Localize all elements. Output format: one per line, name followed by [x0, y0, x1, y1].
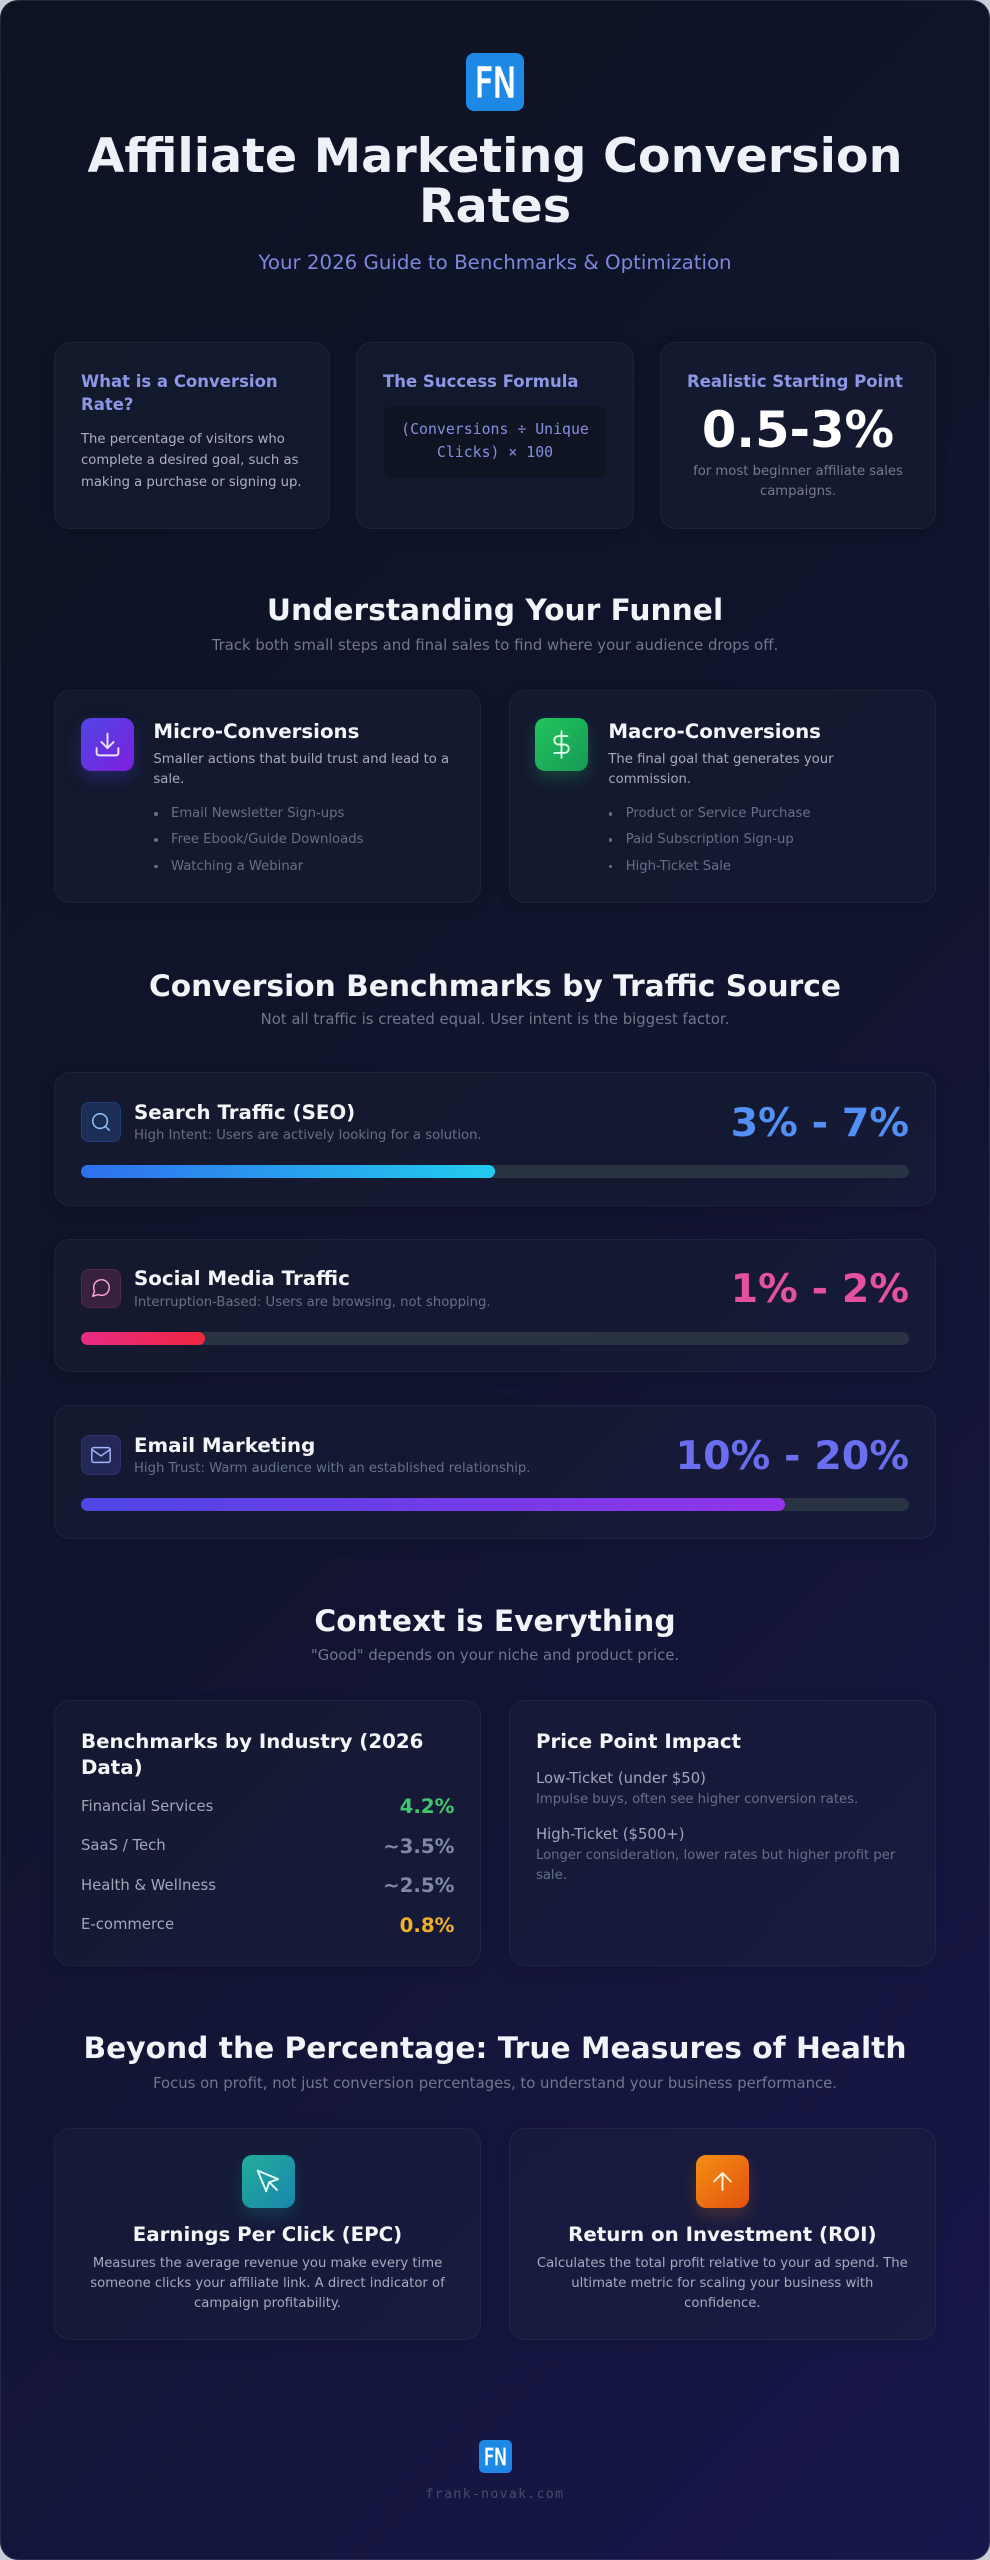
list of macro-conversions: Product or Service Purchase [626, 806, 810, 821]
card heading: Rate? [81, 395, 134, 414]
panel: benchmarks by industry [54, 1700, 481, 1966]
description [90, 2256, 445, 2311]
stat caption: campaigns. [760, 484, 836, 499]
description: campaign profitability. [194, 2296, 341, 2311]
card heading [81, 372, 278, 414]
heading [81, 1730, 423, 1779]
row: financial services: 4.2% [400, 1795, 454, 1818]
high-ticket description: Longer consideration, lower rates but higher profit per [536, 1848, 895, 1863]
formula box: Clicks) × 100 [437, 442, 553, 460]
description: Interruption-Based: Users are browsing, not shopping. [134, 1294, 491, 1310]
panel: what is a conversion rate [54, 342, 330, 529]
heading: Email Marketing [134, 1434, 315, 1457]
card body text: making a purchase or signing up. [81, 475, 302, 490]
icon: dollar [535, 718, 588, 771]
card body text: complete a desired goal, such as [81, 453, 298, 468]
description: sale. [153, 772, 184, 787]
panel: search traffic [54, 1072, 936, 1206]
high-ticket description: sale. [536, 1868, 567, 1883]
formula box: (Conversions ÷ Unique [401, 420, 589, 438]
subtitle: Your 2026 Guide to Benchmarks & Optimization [258, 251, 732, 274]
list of micro-conversions: Watching a Webinar [171, 859, 303, 874]
logo: FN [466, 53, 524, 111]
panel: micro-conversions [54, 690, 481, 903]
icon: arrow up [696, 2155, 749, 2208]
list of macro-conversions [609, 806, 810, 874]
row: health [81, 1874, 454, 1897]
formula box [384, 406, 606, 478]
progress bar [81, 1165, 909, 1178]
description: High Intent: Users are actively looking for a solution. [134, 1128, 482, 1143]
icon: download [81, 718, 134, 771]
description [537, 2256, 908, 2311]
heading: Earnings Per Click (EPC) [133, 2223, 402, 2246]
section heading: beyond: Beyond the Percentage: True Measures of Health [84, 2031, 906, 2066]
description: confidence. [684, 2296, 761, 2311]
section subheading: context: "Good" depends on your niche and product price. [311, 1646, 679, 1664]
stat caption: for most beginner affiliate sales [693, 464, 903, 479]
icon: cursor [242, 2155, 295, 2208]
list of macro-conversions: Paid Subscription Sign-up [626, 832, 794, 847]
icon: chat bubble [81, 1268, 121, 1308]
panel: email marketing [54, 1405, 936, 1538]
row: e-commerce: E-commerce [81, 1915, 174, 1933]
icon: envelope [81, 1435, 121, 1475]
panel: social media traffic [54, 1238, 936, 1372]
row: saas: SaaS / Tech [81, 1836, 166, 1854]
high-ticket description [536, 1848, 896, 1883]
value: 10% - 20% [676, 1432, 909, 1478]
row: financial services [81, 1795, 454, 1818]
section heading: benchmarks: Conversion Benchmarks by Traffic Source [149, 968, 841, 1004]
footer url: frank-novak.com [426, 2487, 564, 2502]
panel: earnings per click [54, 2128, 481, 2340]
card heading: Realistic Starting Point [687, 372, 903, 391]
description: Smaller actions that build trust and lead to a [153, 752, 449, 767]
card body text: The percentage of visitors who [81, 432, 285, 447]
list of macro-conversions: High-Ticket Sale [626, 859, 731, 874]
list of micro-conversions [154, 806, 363, 874]
row: saas: ~3.5% [383, 1834, 454, 1858]
description [153, 752, 449, 787]
low-ticket description: Impulse buys, often see higher conversion rates. [536, 1792, 858, 1807]
big stat: 0.5-3% [702, 401, 894, 459]
description: High Trust: Warm audience with an established relationship. [134, 1461, 530, 1476]
value: 3% - 7% [731, 1100, 909, 1146]
list of micro-conversions: Free Ebook/Guide Downloads [171, 832, 363, 847]
card heading: What is a Conversion [81, 372, 278, 391]
description: Measures the average revenue you make every time [93, 2256, 442, 2271]
description: The final goal that generates your [608, 752, 834, 767]
heading: Search Traffic (SEO) [134, 1101, 355, 1124]
icon: search [81, 1102, 121, 1142]
title [88, 129, 902, 234]
title: Affiliate Marketing Conversion [88, 129, 902, 184]
value: 1% - 2% [731, 1266, 909, 1312]
heading: Macro-Conversions [608, 720, 821, 743]
panel: price point impact [509, 1700, 936, 1966]
list of micro-conversions: Email Newsletter Sign-ups [171, 806, 344, 821]
section heading: funnel: Understanding Your Funnel [267, 593, 723, 628]
section subheading: beyond: Focus on profit, not just conversion percentages, to understand your business performance. [153, 2074, 837, 2092]
heading: Social Media Traffic [134, 1267, 350, 1290]
description: someone clicks your affiliate link. A direct indicator of [90, 2276, 445, 2291]
heading: Data) [81, 1756, 143, 1779]
row: health: ~2.5% [383, 1874, 454, 1897]
card body text [80, 432, 302, 490]
description: commission. [608, 772, 691, 787]
heading: Micro-Conversions [153, 720, 359, 743]
card heading: The Success Formula [383, 372, 579, 391]
row: e-commerce [81, 1914, 454, 1936]
row: e-commerce: 0.8% [400, 1914, 454, 1936]
description [608, 752, 834, 787]
section subheading: benchmarks: Not all traffic is created equal. User intent is the biggest factor. [261, 1010, 729, 1028]
heading: Benchmarks by Industry (2026 [81, 1730, 423, 1753]
title: Rates [419, 179, 571, 234]
low-ticket label: Low-Ticket (under $50) [536, 1769, 706, 1787]
row: saas [81, 1834, 454, 1858]
section subheading: funnel: Track both small steps and final sales to find where your audience drops off. [212, 636, 778, 654]
panel: macro-conversions [509, 690, 936, 903]
panel: return on investment [509, 2128, 936, 2340]
high-ticket label: High-Ticket ($500+) [536, 1825, 685, 1843]
progress bar [81, 1498, 909, 1511]
description: ultimate metric for scaling your business with [571, 2276, 873, 2291]
progress bar [81, 1332, 909, 1344]
heading: Price Point Impact [536, 1730, 741, 1753]
row: health: Health & Wellness [81, 1876, 216, 1894]
heading: Return on Investment (ROI) [568, 2223, 877, 2246]
stat caption [693, 464, 903, 499]
description: Calculates the total profit relative to your ad spend. The [537, 2256, 908, 2271]
row: financial services: Financial Services [81, 1797, 213, 1815]
panel: the success formula [356, 342, 634, 529]
panel: realistic starting point [660, 342, 936, 529]
section heading: context: Context is Everything [314, 1604, 676, 1638]
footer logo [478, 2440, 512, 2473]
